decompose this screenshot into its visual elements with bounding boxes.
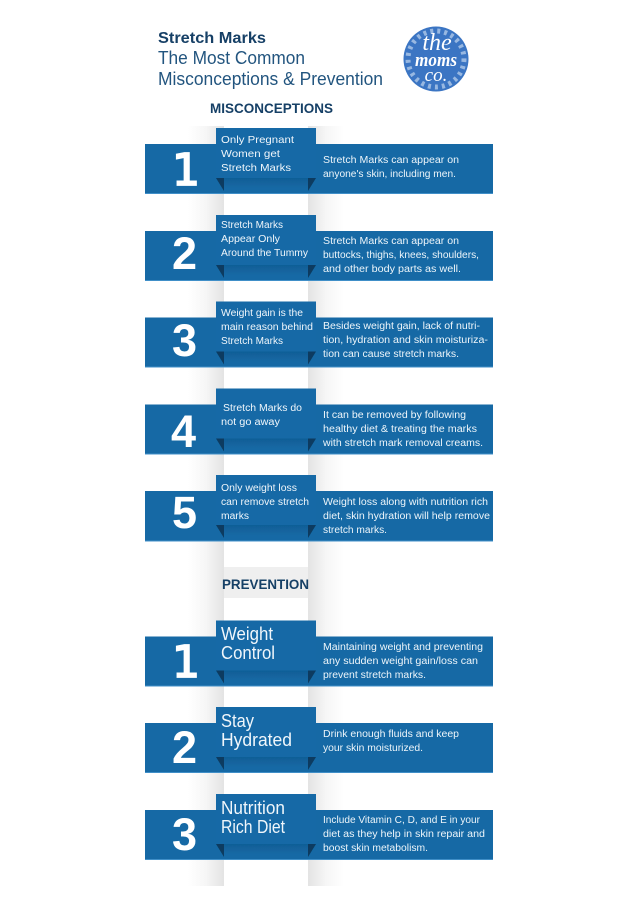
misconception 4: healthy diet & treating the marks	[323, 424, 477, 435]
prevention 2: 2	[172, 722, 197, 773]
misconception 4: not go away	[221, 417, 280, 428]
prevention 1	[145, 620, 493, 688]
prevention 1: Maintaining weight and preventing	[323, 642, 483, 653]
logo: the moms co.	[404, 26, 468, 92]
misconception 3: main reason behind	[221, 322, 313, 333]
misconception 2: Around the Tummy	[221, 248, 308, 259]
misconception 4: with stretch mark removal creams.	[322, 438, 483, 449]
prevention 2: Drink enough fluids and keep	[323, 729, 459, 740]
misconception 1: anyone's skin, including men.	[323, 169, 456, 180]
logo: the moms co.: moms	[415, 50, 457, 71]
misconception 5: 5	[172, 487, 197, 538]
misconception 2: Stretch Marks	[221, 220, 283, 231]
prevention 3: Include Vitamin C, D, and E in your	[323, 815, 481, 826]
misconception 2: Stretch Marks can appear on	[323, 236, 459, 247]
misconception 2	[145, 215, 493, 281]
prevention 3: Rich Diet	[221, 817, 285, 837]
heading: misconceptions: MISCONCEPTIONS	[210, 100, 333, 116]
misconception 5: Only weight loss	[221, 483, 297, 494]
misconception 5: diet, skin hydration will help remove	[323, 511, 490, 522]
misconception 3: tion, hydration and skin moisturiza-	[323, 335, 488, 346]
logo: the moms co.: co.	[425, 65, 447, 86]
prevention 2	[145, 707, 493, 773]
misconception 3: Stretch Marks	[221, 336, 283, 347]
title block: Stretch Marks	[158, 30, 266, 47]
prevention 1: 1	[172, 637, 200, 688]
prevention 2: your skin moisturized.	[323, 743, 423, 754]
misconception 3	[145, 302, 493, 368]
misconception 5: Weight loss along with nutrition rich	[323, 497, 488, 508]
prevention 3: boost skin metabolism.	[323, 843, 428, 854]
title block: The Most Common	[158, 48, 305, 68]
heading: prevention: PREVENTION	[222, 576, 309, 592]
misconception 1: Women get	[221, 148, 280, 160]
misconception 1: Only Pregnant	[221, 134, 294, 146]
misconception 1: Stretch Marks can appear on	[323, 155, 459, 166]
prevention 2: Stay	[221, 711, 254, 731]
misconception 2: Appear Only	[221, 234, 280, 245]
misconception 3: tion can cause stretch marks.	[323, 349, 459, 360]
misconception 2: buttocks, thighs, knees, shoulders,	[323, 250, 479, 261]
misconception 3: Besides weight gain, lack of nutri-	[323, 321, 480, 332]
prevention 3: diet as they help in skin repair and	[323, 829, 485, 840]
misconception 5: can remove stretch	[221, 497, 309, 508]
misconception 5	[145, 475, 493, 542]
prevention 2: Hydrated	[221, 730, 292, 750]
misconception 4: It can be removed by following	[323, 410, 466, 421]
prevention 3	[145, 794, 493, 860]
misconception 5: stretch marks.	[323, 525, 387, 536]
prevention 3: 3	[172, 809, 197, 860]
prevention 1: Weight	[221, 624, 273, 644]
misconception 1: Stretch Marks	[221, 162, 291, 174]
misconception 2: 2	[172, 228, 197, 279]
heading: prevention	[222, 567, 309, 598]
prevention 1: prevent stretch marks.	[323, 670, 426, 681]
misconception 3: Weight gain is the	[221, 308, 303, 319]
misconception 4	[145, 388, 493, 457]
misconception 1	[145, 128, 493, 196]
misconception 4: 4	[171, 406, 196, 457]
prevention 3: Nutrition	[221, 798, 285, 818]
misconception 3: 3	[172, 315, 197, 366]
misconception 4: Stretch Marks do	[223, 403, 302, 414]
column shadows	[188, 126, 344, 886]
misconception 5: marks	[221, 511, 249, 522]
misconception 1: 1	[172, 145, 200, 196]
title block	[158, 30, 383, 89]
title block: Misconceptions & Prevention	[158, 69, 383, 89]
logo: the moms co.: the	[422, 30, 452, 56]
prevention 1: any sudden weight gain/loss can	[323, 656, 478, 667]
misconception 2: and other body parts as well.	[323, 264, 461, 275]
prevention 1: Control	[221, 643, 275, 663]
